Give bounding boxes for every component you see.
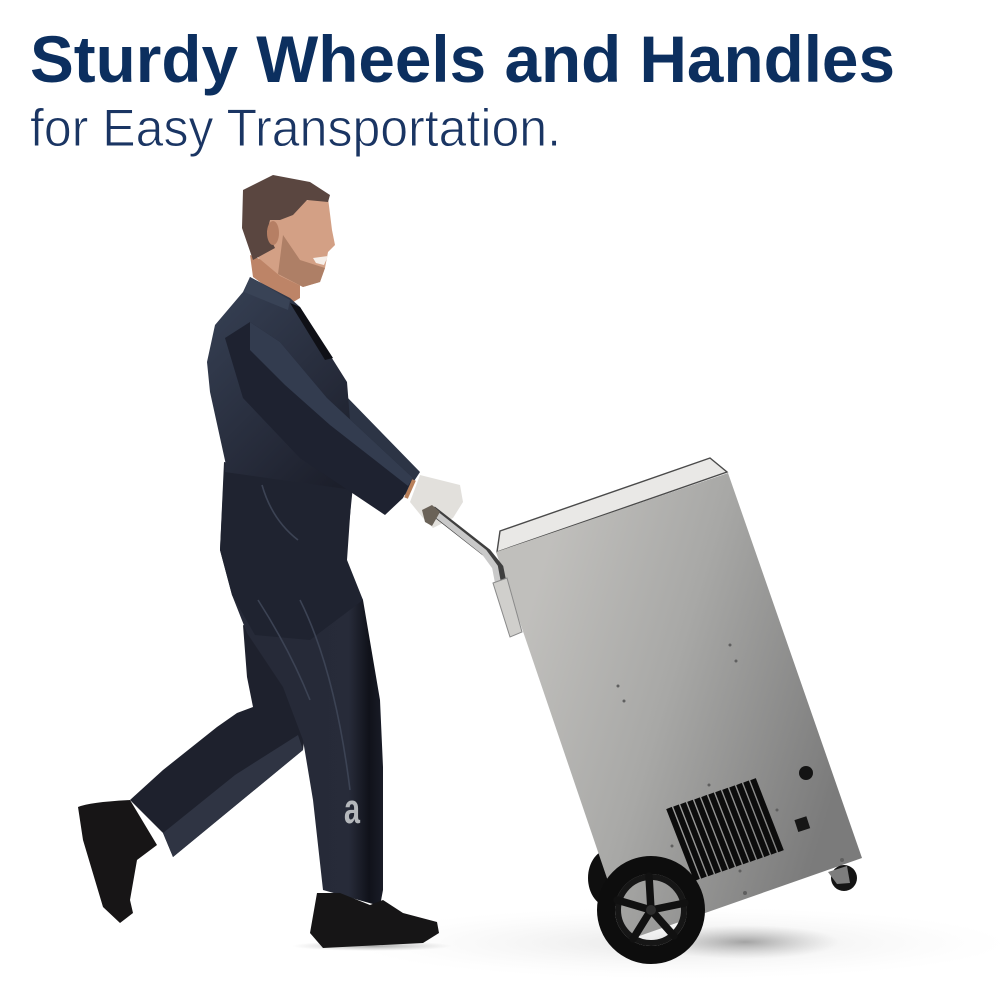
rim — [618, 877, 684, 943]
front leg and waist — [220, 462, 383, 906]
subtitle: for Easy Transportation. — [30, 99, 561, 158]
round port — [799, 766, 813, 780]
handle bar — [431, 510, 498, 583]
ear — [267, 221, 279, 245]
main wheel — [606, 865, 696, 955]
screws — [616, 644, 844, 895]
face — [255, 198, 335, 287]
rear leg lighter panel — [163, 735, 303, 857]
smile — [313, 256, 328, 265]
torso — [207, 277, 353, 490]
handle shadow — [432, 510, 502, 583]
square port — [794, 816, 810, 832]
collar — [244, 277, 290, 310]
vent — [669, 779, 781, 880]
arm highlight — [250, 322, 413, 486]
hand grip — [422, 505, 440, 526]
glove — [410, 475, 463, 528]
trouser upper shade — [220, 470, 363, 640]
arm — [225, 322, 413, 515]
trouser fold highlights — [258, 485, 350, 790]
back wheel — [588, 849, 632, 907]
neck — [250, 255, 300, 304]
rear sleeve — [345, 395, 420, 495]
stubble — [278, 235, 325, 287]
wrist — [406, 480, 414, 498]
front shoe — [310, 893, 439, 948]
floor shadow — [292, 907, 1000, 979]
trouser logo: a — [344, 785, 360, 832]
caster — [828, 865, 857, 891]
spokes — [617, 876, 685, 939]
title: Sturdy Wheels and Handles — [30, 22, 895, 96]
rear shoe — [78, 800, 157, 923]
handle bracket — [493, 578, 522, 637]
tyre — [606, 865, 696, 955]
worker figure — [78, 175, 463, 948]
rear leg — [130, 625, 310, 857]
open collar shirt — [290, 303, 333, 360]
dehumidifier — [422, 458, 862, 955]
hair — [242, 175, 330, 260]
body — [496, 473, 862, 940]
top lid — [497, 458, 727, 552]
